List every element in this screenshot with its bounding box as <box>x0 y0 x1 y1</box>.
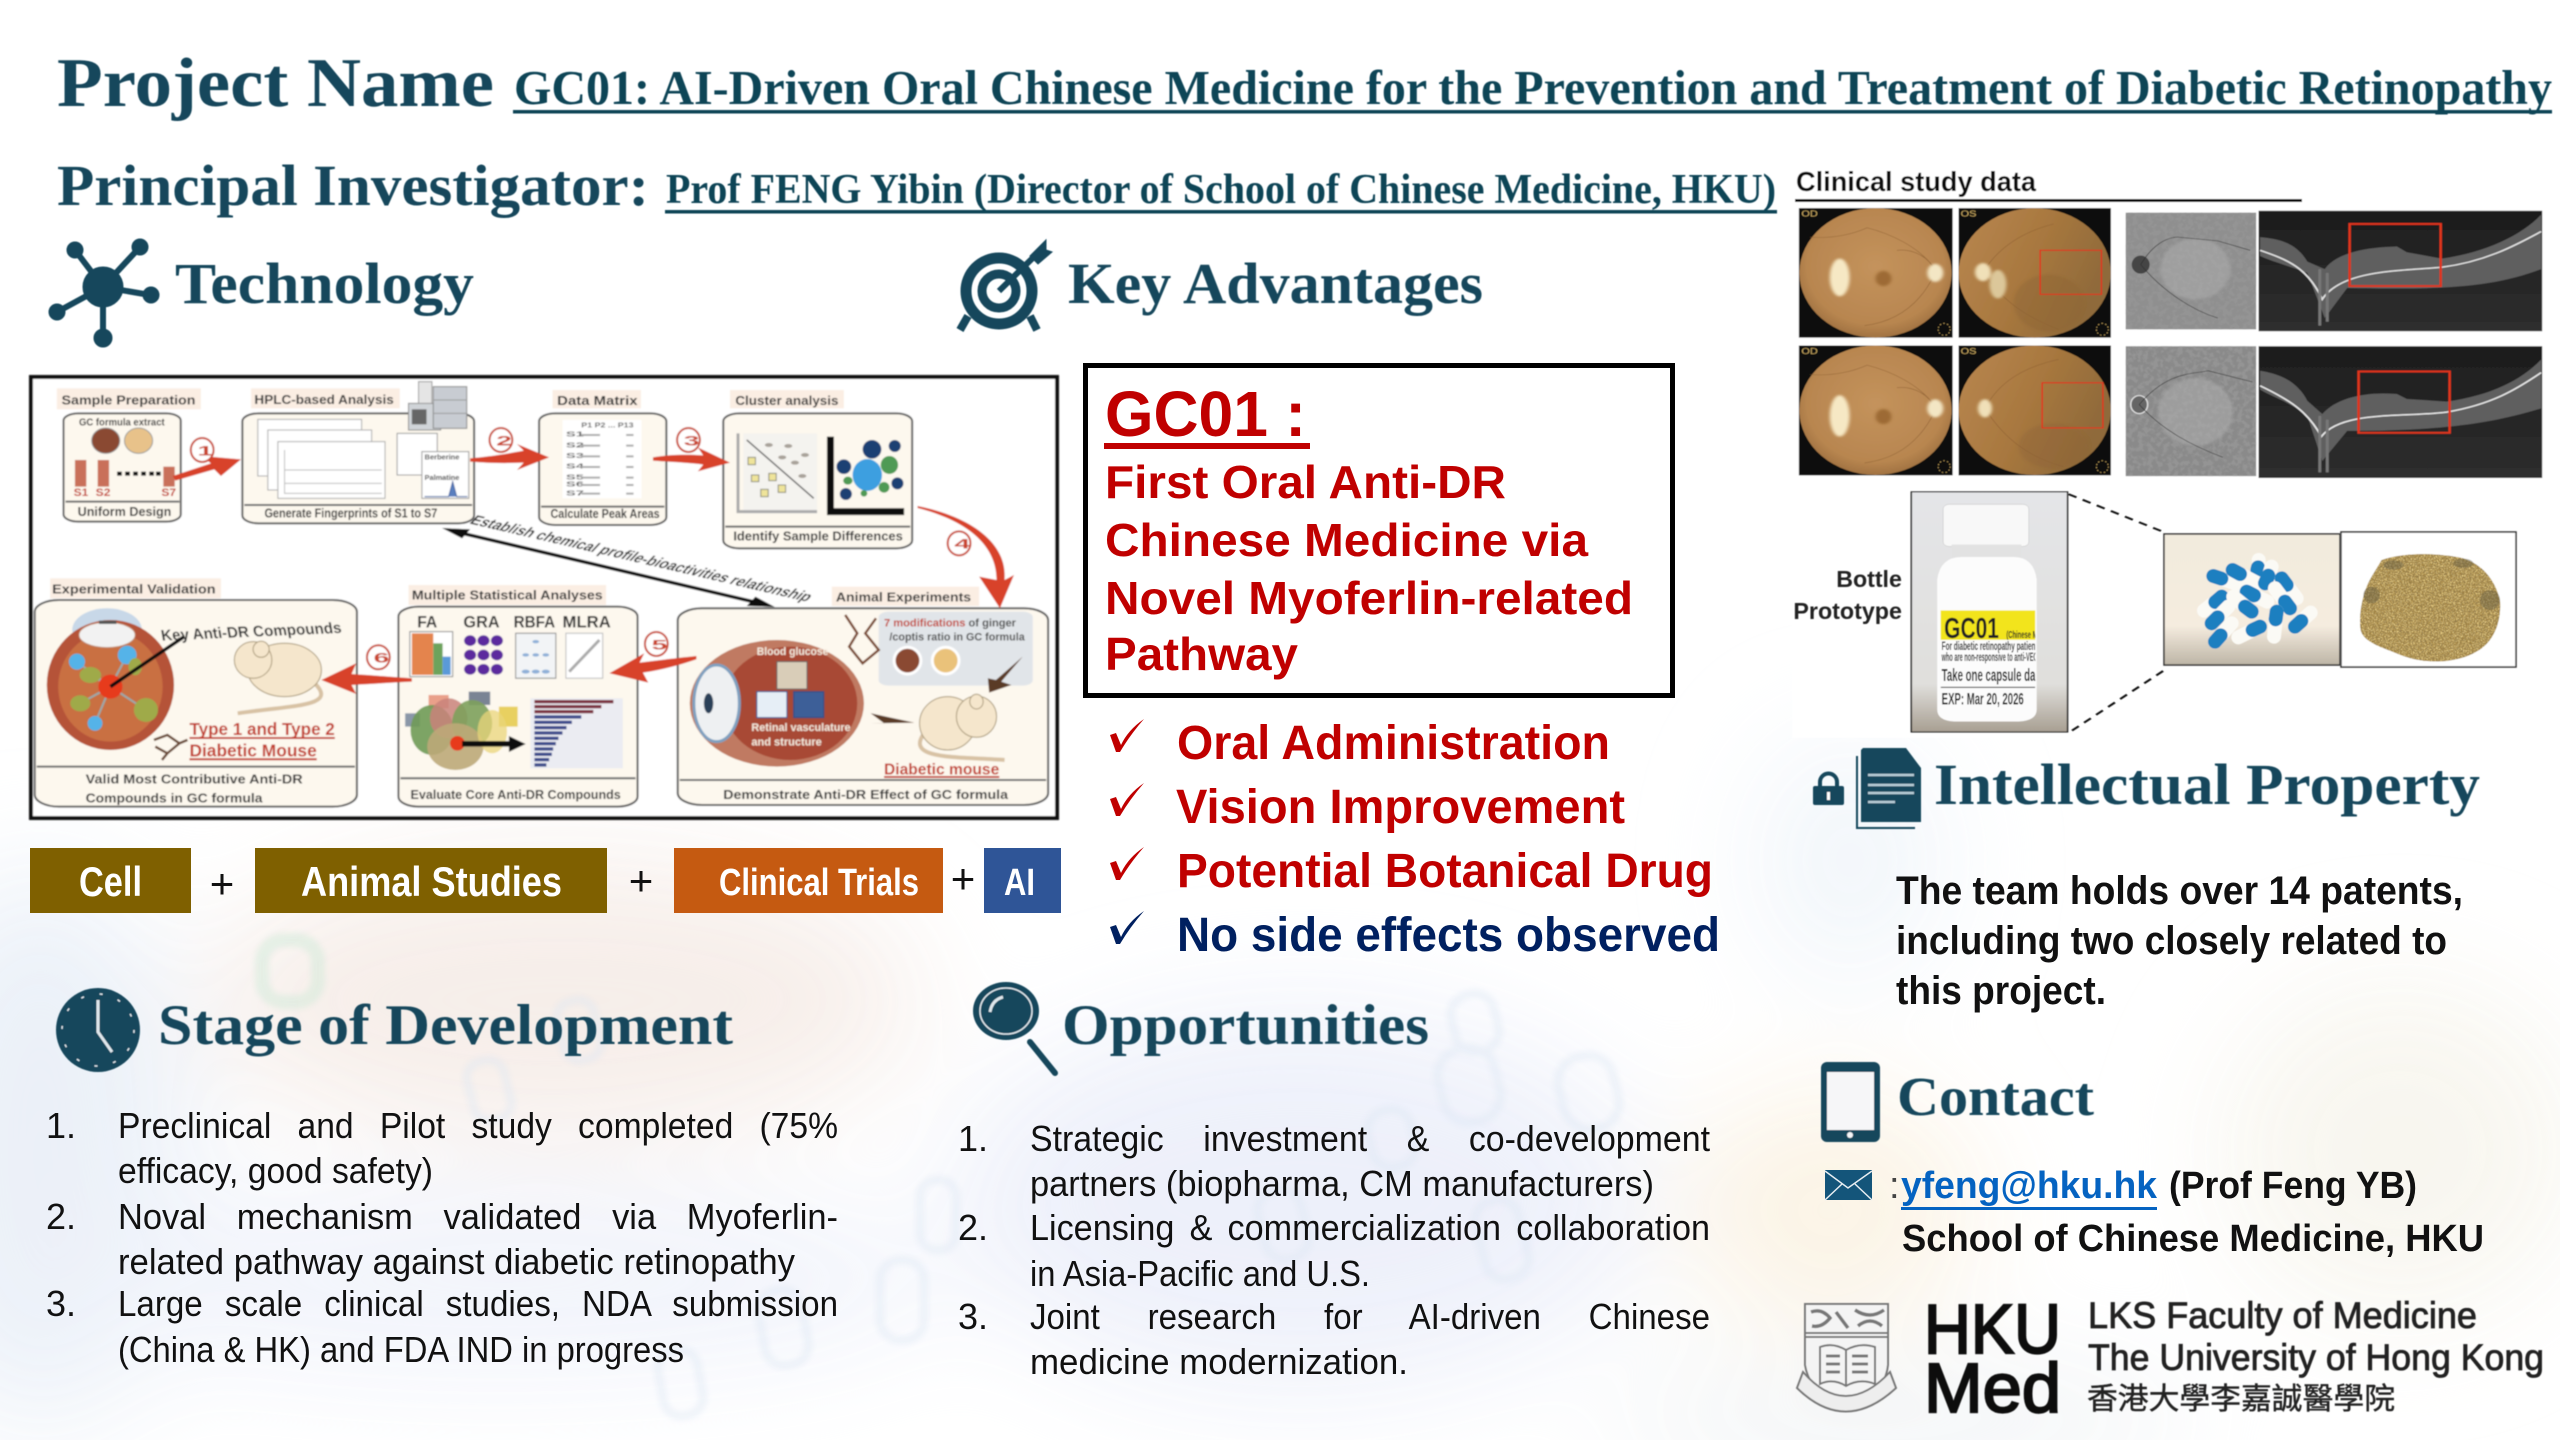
tag: cell <box>30 848 191 913</box>
panel: animal experiments <box>678 587 1048 805</box>
contact details: : <box>1889 1165 1900 1207</box>
panel: statistical analyses: RBFA <box>514 612 555 631</box>
arrows: process steps <box>173 428 1014 694</box>
bottle photo: GC01 <box>1944 613 1999 645</box>
heading: key advantages: Key Advantages <box>1068 251 1483 316</box>
stage list: efficacy, good safety) <box>118 1150 433 1191</box>
panel: statistical analyses: MLRA <box>563 612 611 631</box>
contact details: (Prof Feng YB) <box>2169 1165 2417 1207</box>
panel: data matrix: Data Matrix <box>557 394 638 408</box>
icon: network <box>49 239 159 347</box>
panel: statistical analyses: GRA <box>463 612 500 631</box>
panel: animal experiments: and structure <box>751 736 822 748</box>
HKU Med logo: HKU <box>1924 1290 2061 1368</box>
heading: intellectual property <box>1813 748 2480 828</box>
technology workflow diagram: Generate Fingerprints of S1 to S7 <box>264 506 437 520</box>
capsule photo <box>2164 534 2340 665</box>
retinal tissue bands <box>2260 215 2541 472</box>
technology workflow diagram <box>31 377 1057 818</box>
stage list: 1. <box>46 1105 76 1146</box>
opportunities list: Joint research for AI-driven Chinese <box>1030 1296 1710 1337</box>
label: bottle prototype <box>1793 566 1902 624</box>
heading: contact <box>1821 1062 2095 1142</box>
icon: mouse <box>234 641 321 713</box>
panel: animal experiments: Demonstrate Anti-DR Effect of GC formula <box>723 788 1008 802</box>
tag: animal studies: Animal Studies <box>301 858 562 905</box>
panel: GC01 box <box>1086 366 1672 696</box>
fundus images: OS <box>1961 347 1977 356</box>
opportunities list: 3. <box>958 1296 988 1337</box>
tag: AI <box>984 848 1061 913</box>
OCT images <box>2126 211 2542 478</box>
panel: sample preparation <box>57 388 201 522</box>
step numbers: 5 <box>652 637 667 652</box>
panel: GC01 box: First Oral Anti-DR <box>1105 456 1506 508</box>
clinical study data <box>1792 160 2560 738</box>
panel: experimental validation: Valid Most Contributive Anti-DR <box>86 772 303 786</box>
panel: HPLC analysis: Palmatine <box>425 474 460 482</box>
panel: data matrix <box>539 390 666 525</box>
panel: animal experiments: Blood glucose <box>757 645 828 657</box>
heading: technology: Technology <box>175 251 474 316</box>
HKU Med logo: 香港大學李嘉誠醫學院 <box>2087 1383 2395 1416</box>
stage list: Noval mechanism validated via Myoferlin- <box>118 1196 838 1237</box>
stage list: 2. <box>46 1196 76 1237</box>
icon: mouse <box>920 694 1005 760</box>
fundus images: OD <box>1801 347 1818 356</box>
panel: data matrix: S7 <box>566 489 584 497</box>
panel: animal experiments: Retinal vasculature <box>751 721 851 733</box>
panel: data matrix: S5 <box>566 473 585 481</box>
icon: target <box>960 240 1052 330</box>
bottle photo: Take one capsule daily <box>1942 667 2047 685</box>
bottle photo: EXP: Mar 20, 2026 <box>1942 690 2024 709</box>
heading: technology <box>49 239 474 347</box>
plus: + <box>210 860 234 907</box>
panel: sample preparation: S2 <box>96 487 110 499</box>
title: project name: Project Name <box>57 45 494 122</box>
contact details: School of Chinese Medicine, HKU <box>1902 1218 2484 1260</box>
HKU Med logo <box>1797 1290 2544 1427</box>
contact details: yfeng@hku.hk <box>1901 1165 2158 1207</box>
panel: sample preparation: Uniform Design <box>78 505 171 519</box>
icon: document <box>1857 748 1921 828</box>
heading: opportunities: Opportunities <box>1062 994 1429 1057</box>
opportunities list: in Asia-Pacific and U.S. <box>1030 1253 1370 1294</box>
panel: animal experiments: Diabetic mouse <box>884 761 999 778</box>
tag: cell: Cell <box>79 858 142 905</box>
check: oral administration: Oral Administration <box>1177 717 1610 770</box>
plus: + <box>951 855 975 902</box>
step numbers: 2 <box>496 433 512 448</box>
panel: data matrix: S1 <box>566 430 585 439</box>
icon: crest <box>1797 1304 1896 1412</box>
label: bottle prototype: Prototype <box>1793 598 1902 624</box>
panel: data matrix: P1 P2 ... P13 <box>581 421 634 429</box>
panel: GC01 box: Novel Myoferlin-related <box>1105 572 1633 624</box>
stage list: Large scale clinical studies, NDA submission <box>118 1283 838 1324</box>
bottle photo: (Chinese Med) <box>2006 630 2046 640</box>
panel: experimental validation: Experimental Validation <box>52 582 216 596</box>
step numbers: 1 <box>197 443 213 458</box>
stage list: 3. <box>46 1283 76 1324</box>
HKU Med logo: The University of Hong Kong <box>2088 1337 2544 1378</box>
opportunities list <box>958 1118 1710 1382</box>
fundus images: OD <box>1801 210 1818 219</box>
technology workflow diagram: Calculate Peak Areas <box>550 507 660 521</box>
IP text <box>1896 869 2463 1013</box>
panel: cluster analysis <box>723 390 912 548</box>
principal investigator <box>57 153 1777 218</box>
venn <box>405 692 526 770</box>
panel: experimental validation: Diabetic Mouse <box>189 741 317 761</box>
plus: + <box>629 857 653 904</box>
title: project name: GC01: AI-Driven Oral Chinese Medicine for the Prevention and Treatment of Diabetic Retinopathy <box>514 60 2552 115</box>
panel: experimental validation <box>35 578 357 807</box>
powder photo <box>2341 532 2516 667</box>
fundus images: OS <box>1961 210 1977 219</box>
tag: clinical trials <box>674 848 943 913</box>
step numbers <box>191 428 971 669</box>
panel: experimental validation: Compounds in GC formula <box>86 791 263 805</box>
panel: data matrix: S2 <box>566 441 584 449</box>
step numbers: 4 <box>954 536 971 552</box>
opportunities list: Licensing & commercialization collaboration <box>1030 1207 1710 1248</box>
panel: animal experiments: /coptis ratio in GC formula <box>889 631 1025 643</box>
principal investigator: Principal Investigator: <box>57 153 649 218</box>
bottle prototype <box>1793 492 2163 732</box>
arrow: relationship double arrow: Establish chemical profile-bioactivities relationship <box>466 513 817 605</box>
panel: statistical analyses: FA <box>417 612 437 631</box>
arrow: relationship double arrow <box>442 513 817 607</box>
check: vision improvement: Vision Improvement <box>1176 781 1625 834</box>
fundus images <box>1799 208 2111 475</box>
panel: sample preparation: S1 <box>74 487 88 499</box>
tag: animal studies <box>255 848 607 913</box>
panel: sample preparation: S7 <box>161 487 176 499</box>
label: bottle prototype: Bottle <box>1836 566 1902 592</box>
panel: animal experiments: 7 modifications of ginger <box>884 617 1016 629</box>
panel: HPLC analysis <box>242 382 474 523</box>
panel: sample preparation: Sample Preparation <box>62 393 195 408</box>
heading: opportunities <box>973 982 1429 1073</box>
panel: experimental validation: Type 1 and Type 2 <box>189 719 335 739</box>
IP text: this project. <box>1896 969 2106 1013</box>
panel: HPLC analysis: HPLC-based Analysis <box>254 393 394 407</box>
panel: HPLC analysis: Berberine <box>425 453 460 461</box>
stage list <box>46 1105 838 1370</box>
panel: cluster analysis: Identify Sample Differences <box>733 529 903 544</box>
panel: data matrix: S6 <box>566 480 585 489</box>
dashed callout lines <box>2069 494 2163 731</box>
panel: statistical analyses: Multiple Statistical Analyses <box>412 588 603 602</box>
panel: GC01 box: Pathway <box>1105 628 1298 680</box>
contact details <box>1825 1165 2484 1260</box>
opportunities list: 1. <box>958 1118 988 1159</box>
heading: key advantages <box>960 240 1483 330</box>
panel: sample preparation: GC formula extract <box>79 417 165 428</box>
panel: GC01 box: GC01 : <box>1105 378 1306 450</box>
opportunities list: medicine modernization. <box>1030 1341 1408 1382</box>
tag: clinical trials: Clinical Trials <box>719 862 919 904</box>
step numbers: 3 <box>684 433 699 448</box>
stage list: (China & HK) and FDA IND in progress <box>118 1329 684 1370</box>
HKU Med logo: LKS Faculty of Medicine <box>2088 1295 2477 1336</box>
panel: data matrix: S4 <box>566 462 585 471</box>
advantages checklist <box>1110 717 1720 962</box>
panel: cluster analysis: Cluster analysis <box>735 394 838 408</box>
bottle photo <box>1911 492 2068 732</box>
check: no side effects: No side effects observed <box>1177 909 1720 962</box>
clinical study data: Clinical study data <box>1796 166 2036 197</box>
IP text: The team holds over 14 patents, <box>1896 869 2463 913</box>
HKU Med logo: Med <box>1924 1349 2061 1427</box>
title: project name <box>57 45 2552 122</box>
panel: statistical analyses: Evaluate Core Anti-DR Compounds <box>410 788 621 802</box>
icon: clock <box>56 988 140 1072</box>
principal investigator: Prof FENG Yibin (Director of School of Chinese Medicine, HKU) <box>666 167 1776 213</box>
opportunities list: Strategic investment & co-development <box>1030 1118 1710 1159</box>
panel: GC01 box: Chinese Medicine via <box>1105 514 1588 566</box>
heading: stage of development <box>56 988 733 1072</box>
icon: envelope <box>1825 1170 1872 1200</box>
panel: animal experiments: Animal Experiments <box>836 590 971 604</box>
icon: magnifier <box>973 982 1055 1073</box>
icon: lock <box>1813 774 1844 805</box>
tag: AI: AI <box>1004 862 1035 904</box>
heading: contact: Contact <box>1897 1066 2095 1127</box>
stage list: Preclinical and Pilot study completed (75% <box>118 1105 838 1146</box>
stage list: related pathway against diabetic retinopathy <box>118 1241 795 1282</box>
check: potential botanical drug: Potential Botanical Drug <box>1177 845 1713 898</box>
bottle photo: For diabetic retinopathy patients <box>1942 639 2041 653</box>
panel: experimental validation: Key Anti-DR Compounds <box>160 620 343 644</box>
step numbers: 6 <box>374 650 389 666</box>
heading: intellectual property: Intellectual Property <box>1934 752 2480 817</box>
heading: stage of development: Stage of Development <box>158 994 733 1057</box>
icon: phone <box>1821 1062 1880 1142</box>
opportunities list: 2. <box>958 1207 988 1248</box>
bottle prototype: who are non-responsive to anti-VEGF <box>1941 650 2041 664</box>
panel: statistical analyses <box>398 585 638 807</box>
panel: data matrix: S3 <box>566 452 585 460</box>
opportunities list: partners (biopharma, CM manufacturers) <box>1030 1163 1654 1204</box>
IP text: including two closely related to <box>1896 919 2447 963</box>
